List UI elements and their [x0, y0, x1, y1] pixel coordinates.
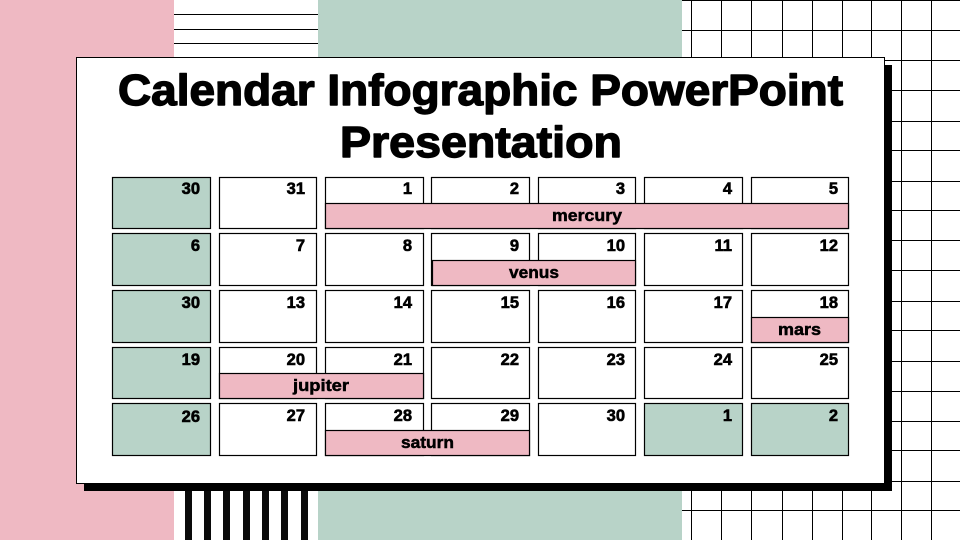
- day 20: 20: [287, 351, 305, 369]
- day 7: 7: [296, 237, 305, 255]
- day 18: [752, 290, 848, 342]
- day 3: [538, 178, 636, 228]
- day 13: 13: [287, 294, 305, 312]
- day 26: [112, 404, 210, 456]
- day 18: 18: [820, 294, 838, 312]
- day 29: 29: [501, 407, 519, 425]
- day 21: 21: [394, 351, 412, 369]
- day 25: [752, 348, 848, 398]
- day 4: [644, 178, 742, 228]
- day 29: [432, 404, 530, 456]
- day 2: 2: [510, 180, 519, 198]
- day 28: [326, 404, 424, 456]
- day 15: 15: [501, 294, 519, 312]
- day 2: [432, 178, 530, 228]
- title: [118, 66, 843, 167]
- day 14: 14: [394, 294, 413, 312]
- week 5: [112, 404, 848, 456]
- week 4: [112, 348, 848, 398]
- day 24: 24: [714, 351, 733, 369]
- event bar: mars: mars: [778, 320, 821, 339]
- day 23: 23: [607, 351, 625, 369]
- day 16: 16: [607, 294, 625, 312]
- day 13: [220, 290, 316, 342]
- event bar: jupiter: [220, 374, 424, 398]
- day 15: [432, 290, 530, 342]
- background: green band: [318, 0, 682, 540]
- event bar: mercury: mercury: [552, 206, 623, 225]
- week 2: [112, 234, 848, 286]
- day 1: [326, 178, 424, 228]
- day 12: 12: [820, 237, 838, 255]
- day 16: [538, 290, 636, 342]
- background: pink band: [0, 0, 174, 540]
- day 23: [538, 348, 636, 398]
- day 9: 9: [510, 237, 519, 255]
- day 3: 3: [616, 180, 625, 198]
- day 12: [752, 234, 848, 286]
- day 27: [220, 404, 316, 456]
- day 8: [326, 234, 424, 286]
- day 31: [220, 178, 316, 228]
- day 21: [326, 348, 424, 398]
- day 30: [538, 404, 636, 456]
- day 2: 2: [829, 407, 838, 425]
- day 14: [326, 290, 424, 342]
- day 6: 6: [191, 237, 200, 255]
- day 6: [112, 234, 210, 286]
- day 8: 8: [403, 237, 412, 255]
- day 9: [432, 234, 530, 286]
- day 31: 31: [287, 180, 305, 198]
- day 25: 25: [820, 351, 838, 369]
- day 19: 19: [182, 351, 200, 369]
- day 5: [752, 178, 848, 228]
- event bar: saturn: saturn: [401, 433, 454, 452]
- event bar: jupiter: jupiter: [292, 376, 349, 395]
- day 26: 26: [182, 408, 200, 426]
- panel: white card: [76, 58, 884, 484]
- day 17: [644, 290, 742, 342]
- day 22: 22: [501, 351, 519, 369]
- day 1: 1: [723, 407, 732, 425]
- event bar: venus: venus: [509, 263, 559, 282]
- day 1: [644, 404, 742, 456]
- day 4: 4: [723, 180, 733, 198]
- event bar: saturn: [326, 430, 530, 456]
- event bar: mercury: [326, 204, 848, 228]
- background: grid pattern: [682, 0, 960, 540]
- day 11: [644, 234, 742, 286]
- background: horizontal lines pattern: [174, 14, 318, 44]
- week 1: [112, 178, 848, 228]
- event bar: mars: [752, 318, 848, 342]
- day 27: 27: [287, 407, 305, 425]
- event bar: venus: [432, 260, 636, 286]
- day 30: [112, 178, 210, 228]
- day 22: [432, 348, 530, 398]
- day 2: [752, 404, 848, 456]
- calendar grid: [112, 178, 848, 456]
- day 20: [220, 348, 316, 398]
- day 19: [112, 348, 210, 398]
- week 3: [112, 290, 848, 342]
- day 11: 11: [715, 237, 732, 255]
- day 7: [220, 234, 316, 286]
- day 28: 28: [394, 407, 412, 425]
- day 1: 1: [403, 180, 412, 198]
- card drop shadow: [84, 65, 892, 491]
- day 24: [644, 348, 742, 398]
- day 10: [538, 234, 636, 286]
- day 30: 30: [182, 294, 200, 312]
- day 17: 17: [714, 294, 732, 312]
- day 5: 5: [829, 180, 838, 198]
- background: vertical stripes pattern: [185, 488, 308, 540]
- title: Presentation: [340, 118, 622, 167]
- title: Calendar Infographic PowerPoint: [118, 66, 843, 115]
- day 30: 30: [182, 180, 200, 198]
- day 30: 30: [607, 407, 625, 425]
- day 30: [112, 290, 210, 342]
- day 10: 10: [607, 237, 625, 255]
